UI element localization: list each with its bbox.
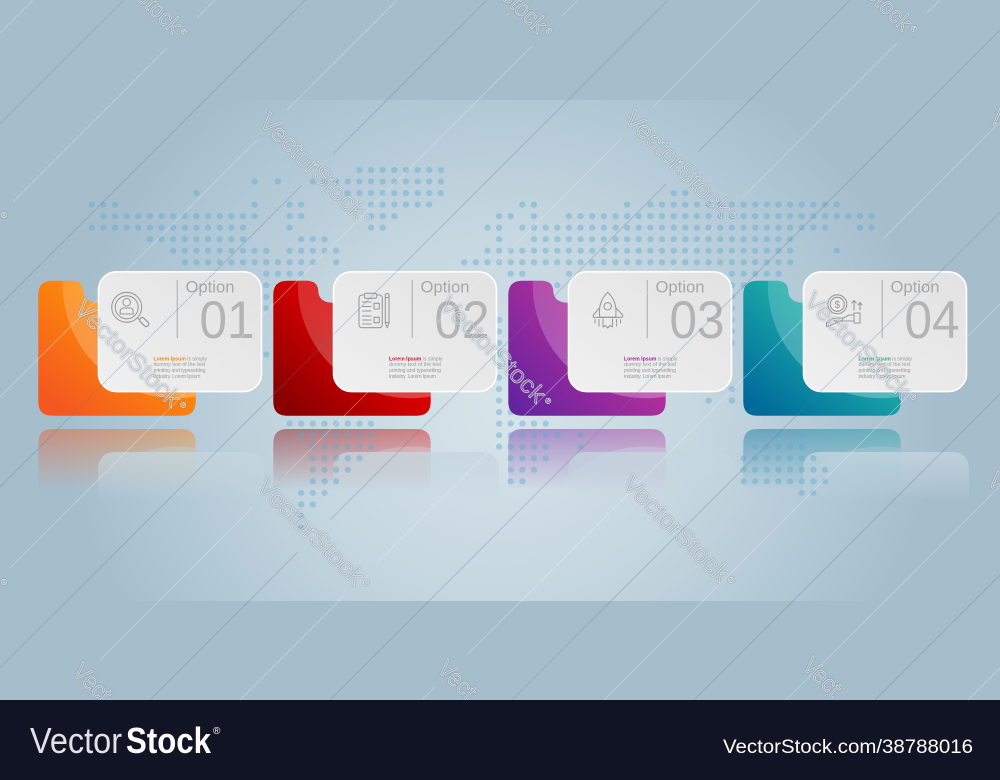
purple folder shape [508,280,666,416]
text block: dummy text of the text [624,362,677,368]
icon: magnifier with person [112,292,150,328]
text block: printing and typesetting [858,368,911,374]
divider [412,280,413,338]
number 03: 03 [670,291,724,350]
text block [389,356,443,380]
text block: industry. Lorem Ipsum [154,374,200,380]
heading: Option: Option [656,278,704,296]
watermarks: VectorStock [69,295,187,413]
text block: Lorem Ipsum is simply [858,356,912,362]
text block: Lorem Ipsum is simply [154,356,207,362]
watermarks: VectorStock [434,291,552,409]
text block: printing and typesetting [624,368,676,374]
watermarks: ® [1,578,7,587]
text block: industry. Lorem Ipsum [858,374,906,380]
text block [858,356,912,380]
watermarks: VectorStock [252,473,370,591]
panel: option 01 [38,271,262,416]
heading: Option: Option [890,278,940,296]
icon: coin in hand with arrows: $ [835,300,841,311]
glass card 04 [804,272,966,392]
teal folder shape [743,280,901,416]
footer logo: Stock [126,720,212,761]
watermarks: ® [543,396,553,406]
heading: Option: Option [420,278,470,296]
divider [647,280,648,338]
icon: rocket [593,292,623,328]
glass card 03 [568,272,732,392]
number 04: 04 [904,291,960,350]
watermarks: VectorStock [254,108,372,226]
watermarks: ® [728,210,738,220]
watermarks: Vect [67,658,117,709]
text block [154,356,207,380]
reflections of the coloured shapes [38,429,901,485]
watermarks: ® [179,27,189,37]
text block: printing and typesetting [389,368,441,374]
glass card 02 [334,272,496,392]
text block: printing and typesetting [154,368,206,374]
text block [624,356,678,380]
footer logo: Vector [30,720,122,761]
text block: dummy text of the text [858,362,911,368]
footer image id: VectorStock.com/38788016 [723,737,973,758]
text block: industry. Lorem Ipsum [624,374,671,380]
watermarks: ® [178,400,188,410]
icon: clipboard and pencil [359,293,389,328]
footer logo: ® [213,726,221,737]
panel: option 02 [273,271,498,416]
watermarks: ® [726,575,736,585]
divider [177,280,178,338]
text block: industry. Lorem Ipsum [389,374,436,380]
number 01: 01 [200,291,254,350]
watermarks: ® [1,211,7,220]
watermarks: Vect [797,652,847,703]
footer bar [0,700,1000,780]
divider [882,280,883,338]
text block: Lorem Ipsum is simply [624,356,678,362]
reflections of the glass cards [98,452,969,500]
watermarks: Vect [432,655,482,706]
red folder shape [273,280,431,416]
watermarks: VectorStock [617,470,735,588]
watermarks: ® [544,26,554,36]
glass card 01 [98,272,262,392]
orange folder shape [38,280,196,416]
number 02: 02 [434,291,490,350]
text block: Lorem Ipsum is simply [389,356,443,362]
icon: coin in hand with arrows [826,295,862,326]
watermarks: VectorStock [619,105,737,223]
text block: dummy text of the text [154,362,206,368]
watermarks: ® [363,213,373,223]
heading: Option: Option [186,278,234,296]
panel: option 04 [743,271,968,416]
watermarks: VectorStock [799,287,917,405]
panel: option 03 [508,271,732,416]
text block: dummy text of the text [389,362,442,368]
watermarks: ® [361,578,371,588]
watermarks: ® [909,24,919,34]
world map of dots [92,170,872,527]
watermarks: ® [908,392,918,402]
background glow panel [0,100,1000,601]
